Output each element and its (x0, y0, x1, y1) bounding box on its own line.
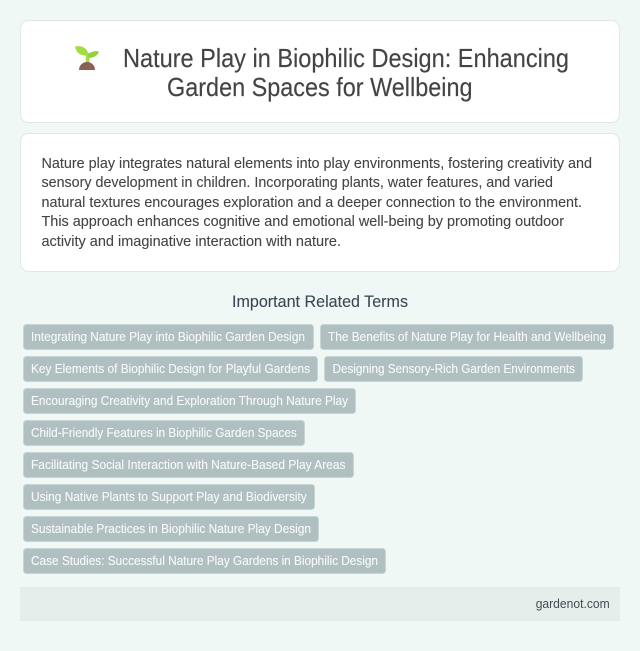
tag: sensory-rich environments: Designing Sensory-Rich Garden Environments (332, 361, 575, 376)
tag: creativity and exploration (24, 388, 356, 414)
text block: description: Nature play integrates natural elements into play environments, fostering creativity and (42, 155, 592, 172)
tag: sensory-rich environments (324, 356, 582, 382)
tag: social interaction (24, 452, 354, 478)
text block: description: natural textures encourages exploration and a deeper connection to the environment. (42, 194, 582, 211)
tag: child-friendly features: Child-Friendly Features in Biophilic Garden Spaces (31, 425, 297, 440)
tag: case studies (24, 548, 386, 574)
heading: important related terms: Important Related Terms (232, 292, 408, 311)
text block: description: This approach enhances cognitive and emotional well-being by promoting outdoor (42, 213, 564, 230)
tag: social interaction: Facilitating Social Interaction with Nature-Based Play Areas (31, 457, 346, 472)
tag: benefits of nature play (320, 324, 614, 350)
heading: title: Garden Spaces for Wellbeing (167, 74, 472, 102)
icon: seedling (75, 46, 99, 70)
tag: native plants: Using Native Plants to Support Play and Biodiversity (31, 489, 307, 504)
text block: description: activity and imaginative interaction with nature. (42, 233, 341, 250)
tag: integrating nature play (24, 324, 314, 350)
text block: description (42, 155, 592, 250)
tag: key elements: Key Elements of Biophilic Design for Playful Gardens (31, 361, 310, 376)
tag: sustainable practices (24, 516, 318, 542)
tag: native plants (24, 484, 314, 510)
tag: creativity and exploration: Encouraging Creativity and Exploration Through Nature Play (31, 393, 349, 408)
tag: sustainable practices: Sustainable Practices in Biophilic Nature Play Design (31, 521, 311, 536)
tag: child-friendly features (24, 420, 304, 446)
panel: term tags (24, 324, 614, 574)
panel: introduction text (20, 134, 620, 272)
tag: key elements (24, 356, 318, 382)
text block: description: sensory development in children. Incorporating plants, water features, and varied (42, 174, 553, 191)
tag: benefits of nature play: The Benefits of Nature Play for Health and Wellbeing (328, 329, 606, 344)
heading: title: Nature Play in Biophilic Design: Enhancing (123, 45, 569, 73)
footer: source: gardenot.com (536, 596, 610, 611)
footer bar (20, 587, 620, 621)
heading: title (123, 45, 569, 102)
tag: case studies: Case Studies: Successful Nature Play Gardens in Biophilic Design (31, 553, 378, 568)
panel: title header (20, 20, 620, 122)
tag: integrating nature play: Integrating Nature Play into Biophilic Garden Design (31, 329, 305, 344)
